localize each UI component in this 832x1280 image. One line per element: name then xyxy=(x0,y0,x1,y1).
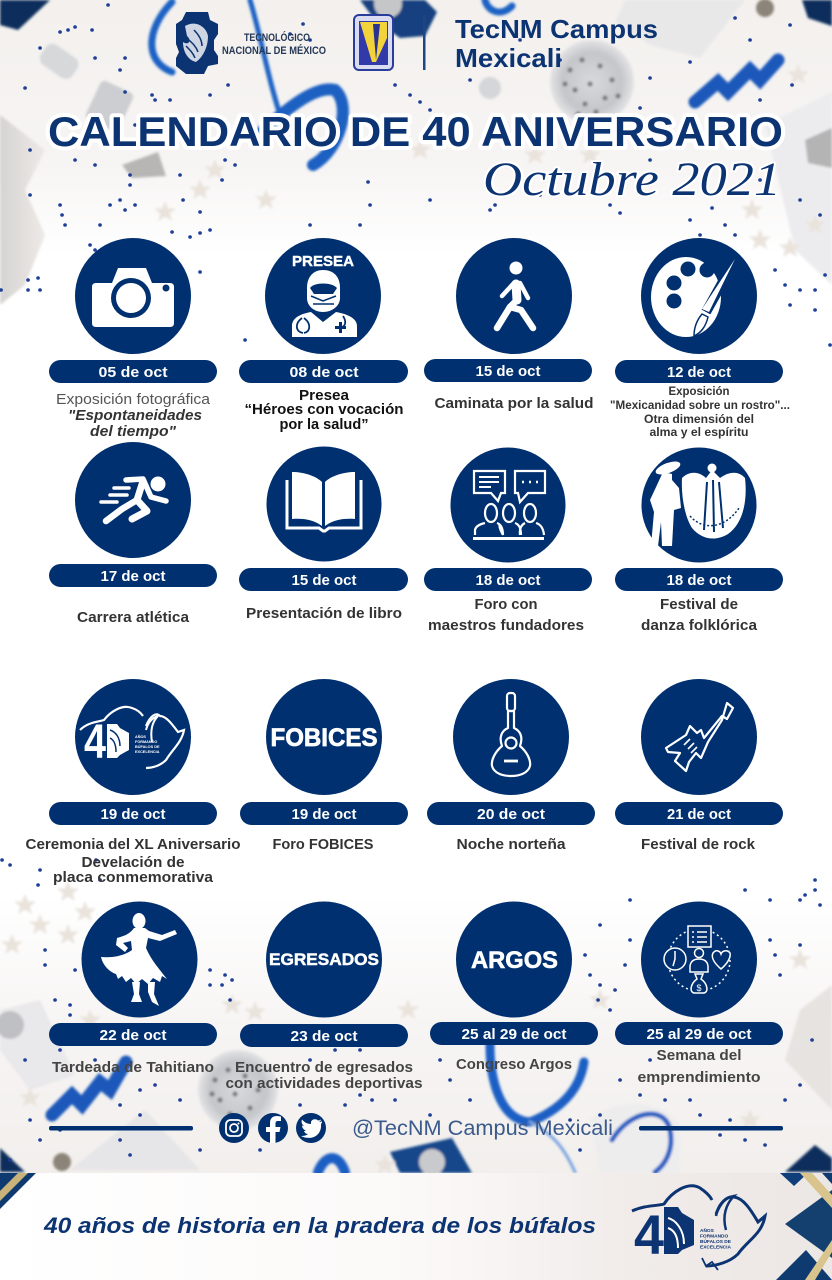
event: 05 de oct, exposición fotográfica: Exposición fotográfica xyxy=(56,392,211,408)
event: 15 de oct, libro xyxy=(239,446,408,622)
event: 12 de oct, exposición: 12 de oct xyxy=(667,365,731,381)
footer 40 years logo: EXCELENCIA xyxy=(700,1244,731,1250)
social media row: @TecNM Campus Mexicali xyxy=(352,1117,613,1140)
icon: 40 years logo in white: AÑOS xyxy=(135,734,146,739)
event: 18 de oct, foro: Foro con xyxy=(474,597,538,613)
event: 25 al 29 de oct, Argos xyxy=(430,902,598,1073)
event: 15 de oct, caminata: Caminata por la salud xyxy=(434,396,594,412)
logo wordmark xyxy=(222,31,326,57)
logo wordmark: TECNOLÓGICO xyxy=(244,31,310,44)
event: 05 de oct, exposición fotográfica: 05 de oct xyxy=(98,365,168,381)
event: 19 de oct, ceremonia: Develación de xyxy=(82,855,184,871)
subtitle: month: Octubre 2021 xyxy=(483,153,781,206)
event: 15 de oct, caminata xyxy=(424,238,594,412)
event: 21 de oct, festival de rock: 21 de oct xyxy=(667,807,731,823)
icon: electric guitar xyxy=(666,703,733,771)
header: Tecnológico Nacional de México logo xyxy=(176,12,326,74)
event: 18 de oct, foro: maestros fundadores xyxy=(428,618,584,634)
header: campus name xyxy=(455,14,658,73)
event: 05 de oct, exposición fotográfica: del tiempo" xyxy=(90,424,177,440)
event: 23 de oct, egresados xyxy=(226,902,422,1092)
event: 08 de oct, presea: “Héroes con vocación xyxy=(244,402,404,418)
icon: acoustic guitar xyxy=(492,693,530,776)
event: 23 de oct, egresados: 23 de oct xyxy=(290,1029,358,1045)
event: 12 de oct, exposición: "Mexicanidad sobre un rostro"... xyxy=(610,400,790,412)
event: 23 de oct, egresados: Encuentro de egresados xyxy=(235,1060,413,1076)
event: 12 de oct, exposición: Otra dimensión del xyxy=(644,414,754,426)
top silver gifts and ornaments xyxy=(0,0,832,305)
event: 25 al 29 de oct, Argos: Congreso Argos xyxy=(456,1057,572,1073)
icon: open book xyxy=(287,472,361,531)
event: 15 de oct, caminata: 15 de oct xyxy=(476,364,541,380)
event: 21 de oct, festival de rock xyxy=(615,679,783,853)
icon: Instagram xyxy=(219,1113,249,1143)
footer band xyxy=(0,1173,832,1280)
bottom blue ribbons xyxy=(52,1045,671,1172)
icon: forum audience xyxy=(474,471,545,535)
event: 22 de oct, tardeada: Tardeada de Tahitiano xyxy=(52,1060,214,1076)
footer 40 years logo: FORMANDO xyxy=(700,1234,729,1240)
logo wordmark: NACIONAL DE MÉXICO xyxy=(222,44,326,57)
event: 18 de oct, foro xyxy=(424,448,592,634)
event: 18 de oct, danza xyxy=(615,448,783,634)
event: 08 de oct, presea: PRESEA xyxy=(292,253,354,270)
event: 20 de oct, noche norteña: Noche norteña xyxy=(456,837,567,853)
event: 19 de oct, ceremonia: Ceremonia del XL Aniversario xyxy=(26,837,241,853)
event: 19 de oct, FOBICES xyxy=(240,679,408,853)
icon: walking person xyxy=(497,262,533,328)
title: CALENDARIO DE 40 ANIVERSARIO xyxy=(48,108,783,155)
footer 40 years logo: 4 xyxy=(634,1203,664,1266)
event: 25 al 29 de oct, emprendimiento xyxy=(615,902,783,1086)
event: 08 de oct, presea: 08 de oct xyxy=(290,365,359,381)
event: 05 de oct, exposición fotográfica xyxy=(49,238,217,440)
event: 20 de oct, noche norteña: 20 de oct xyxy=(477,807,545,823)
event: 22 de oct, tardeada: 22 de oct xyxy=(100,1028,167,1044)
header: campus name: Mexicali xyxy=(455,43,562,73)
icon: entrepreneurship diagram xyxy=(664,926,730,993)
icon: 40 years logo in white: BÚFALOS DE xyxy=(135,744,160,749)
top blue ribbons xyxy=(152,0,778,165)
icon: camera xyxy=(92,268,174,327)
icon: runner xyxy=(101,476,166,521)
event: 19 de oct, ceremonia xyxy=(26,679,241,886)
icon: 40 years logo in white: EXCELENCIA xyxy=(135,750,160,754)
event: 21 de oct, festival de rock: Festival de rock xyxy=(641,837,756,853)
icon: palette and brush xyxy=(651,257,735,337)
event: 08 de oct, presea xyxy=(239,238,408,433)
icon: 40 years logo in white xyxy=(80,707,184,769)
event: 15 de oct, libro: 15 de oct xyxy=(292,573,357,589)
icon: 40 years logo in white: 4 xyxy=(84,716,106,769)
event: 25 al 29 de oct, emprendimiento: emprendimiento xyxy=(638,1070,761,1086)
event: 23 de oct, egresados: EGRESADOS xyxy=(269,950,379,969)
event: 19 de oct, FOBICES: 19 de oct xyxy=(292,807,357,823)
footer tagline: 40 años de historia en la pradera de los búfalos xyxy=(43,1213,596,1238)
footer 40 years logo: AÑOS xyxy=(700,1227,715,1234)
icon: Tahitian dancer silhouette xyxy=(101,913,177,1006)
event: 19 de oct, FOBICES: FOBICES xyxy=(270,724,378,752)
footer 40 years logo xyxy=(632,1186,765,1270)
bottom silver gifts and ornaments xyxy=(0,985,832,1175)
event: 18 de oct, danza: 18 de oct xyxy=(666,573,732,589)
header: campus shield xyxy=(354,15,393,70)
event: 25 al 29 de oct, emprendimiento: Semana del xyxy=(656,1048,742,1064)
event: 19 de oct, FOBICES: Foro FOBICES xyxy=(272,837,374,853)
icon: 40 years logo in white: FORMANDO xyxy=(135,740,157,744)
event: 08 de oct, presea: por la salud” xyxy=(280,417,368,433)
event: 17 de oct, carrera: Carrera atlética xyxy=(77,610,190,626)
event: 12 de oct, exposición xyxy=(610,238,790,439)
event: 12 de oct, exposición: Exposición xyxy=(668,386,730,398)
icon: folk dancers xyxy=(650,459,746,546)
footer diamonds xyxy=(776,1173,832,1280)
event: 19 de oct, ceremonia: placa conmemorativa xyxy=(53,870,214,886)
event: 23 de oct, egresados: con actividades deportivas xyxy=(226,1076,422,1092)
icon: Facebook xyxy=(258,1113,288,1143)
event: 25 al 29 de oct, emprendimiento: $ xyxy=(696,983,702,993)
event: 20 de oct, noche norteña xyxy=(427,679,595,853)
event: 18 de oct, danza: danza folklórica xyxy=(641,618,758,634)
event: 25 al 29 de oct, emprendimiento: 25 al 29 de oct xyxy=(646,1027,752,1043)
header: campus name: TecNM Campus xyxy=(455,14,658,44)
event: 25 al 29 de oct, Argos: 25 al 29 de oct xyxy=(462,1027,567,1043)
event: 18 de oct, foro: 18 de oct xyxy=(476,573,541,589)
event: 15 de oct, libro: Presentación de libro xyxy=(246,606,402,622)
footer 40 years logo: BÚFALOS DE xyxy=(700,1238,732,1245)
event: 12 de oct, exposición: alma y el espíritu xyxy=(650,427,748,439)
icon: Twitter xyxy=(296,1113,326,1143)
header: divider xyxy=(423,15,426,70)
event: 05 de oct, exposición fotográfica: "Espontaneidades xyxy=(68,408,202,424)
event: 19 de oct, ceremonia: 19 de oct xyxy=(100,807,166,823)
icon: doctor with mask xyxy=(292,270,357,337)
event: 18 de oct, danza: Festival de xyxy=(660,597,738,613)
event: 17 de oct, carrera xyxy=(49,442,217,626)
event: 17 de oct, carrera: 17 de oct xyxy=(100,569,166,585)
event: 25 al 29 de oct, Argos: ARGOS xyxy=(471,947,558,974)
event: 08 de oct, presea: Presea xyxy=(299,388,350,404)
social media row xyxy=(49,1113,783,1143)
event: 22 de oct, tardeada xyxy=(49,902,217,1076)
